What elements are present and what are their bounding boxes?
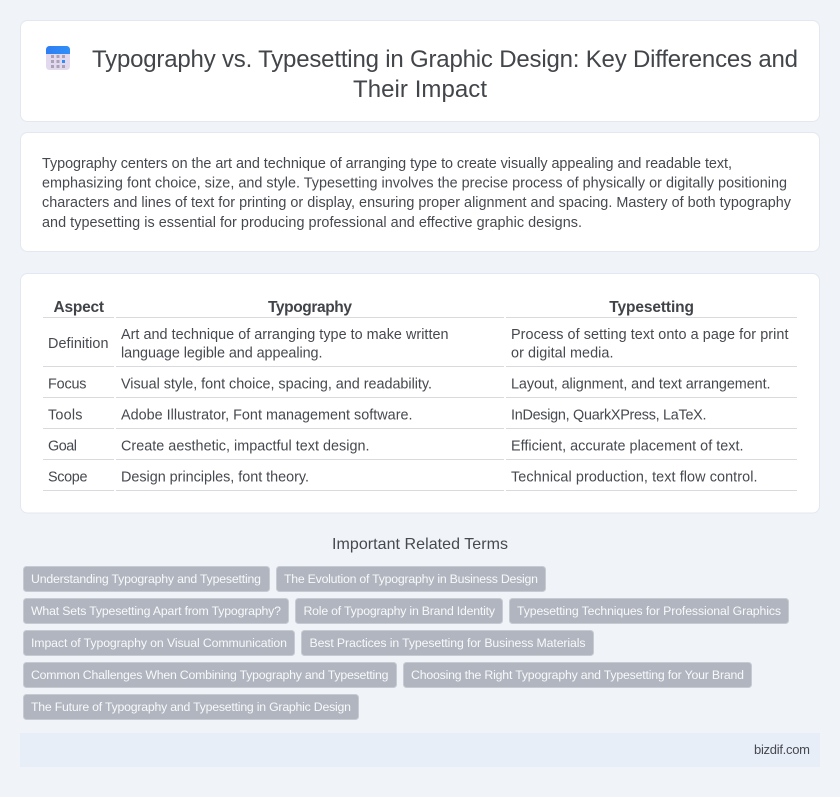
- tag: [24, 694, 358, 720]
- table row: scope: Technical production, text flow control.: [511, 469, 758, 485]
- tag: [24, 566, 270, 592]
- tag: [24, 630, 294, 656]
- panel: intro paragraph: [20, 132, 820, 252]
- table row: scope: [43, 469, 797, 491]
- table row: definition: Art and technique of arranging type to make written: [121, 327, 448, 343]
- tag: [302, 630, 594, 656]
- table row: tools: Tools: [48, 407, 82, 423]
- tag: [24, 598, 288, 624]
- tag: What Sets Typesetting Apart from Typography?: [31, 604, 281, 618]
- table row: definition: or digital media.: [511, 346, 614, 362]
- table row: definition: Process of setting text onto a page for print: [511, 327, 788, 343]
- panel: title card: [20, 20, 820, 122]
- panel: comparison table: [20, 274, 820, 513]
- text block: intro: characters and lines of text for printing or display, ensuring proper alignment and spacing. Mastery of both typography: [42, 195, 792, 211]
- text block: intro: [42, 156, 792, 231]
- tag: The Evolution of Typography in Business Design: [284, 572, 538, 586]
- title: Their Impact: [353, 76, 487, 103]
- panel: related term tags: [24, 566, 788, 720]
- table row: scope: Design principles, font theory.: [121, 469, 309, 485]
- table row: focus: Layout, alignment, and text arrangement.: [511, 376, 770, 392]
- tag: Best Practices in Typesetting for Business Materials: [310, 636, 586, 650]
- table header row: [43, 299, 797, 318]
- tag: Common Challenges When Combining Typography and Typesetting: [31, 668, 389, 682]
- tag: Impact of Typography on Visual Communication: [31, 636, 287, 650]
- table row: tools: InDesign, QuarkXPress, LaTeX.: [511, 407, 706, 423]
- table row: focus: Focus: [48, 376, 86, 392]
- footer source text: bizdif.com: [754, 742, 810, 757]
- tag: Understanding Typography and Typesetting: [31, 572, 261, 586]
- footer bar: [20, 733, 820, 767]
- table row: definition: Definition: [48, 336, 108, 352]
- table row: definition: language legible and appealing.: [121, 346, 322, 362]
- tag: [276, 566, 546, 592]
- table row: focus: [43, 376, 797, 398]
- text block: intro: Typography centers on the art and technique of arranging type to create visually appealing and readable text,: [42, 156, 732, 172]
- table row: goal: Goal: [48, 438, 77, 454]
- tag: [510, 598, 788, 624]
- table row: focus: Visual style, font choice, spacing, and readability.: [121, 376, 432, 392]
- text block: intro: emphasizing font choice, size, and style. Typesetting involves the precise process of physically or digitally positioning: [42, 176, 787, 192]
- table row: goal: Create aesthetic, impactful text design.: [121, 438, 370, 454]
- tag: [296, 598, 502, 624]
- tag: Typesetting Techniques for Professional Graphics: [517, 604, 781, 618]
- tag: [404, 662, 752, 688]
- tag: Role of Typography in Brand Identity: [304, 604, 496, 618]
- title: [92, 46, 798, 103]
- table row: tools: Adobe Illustrator, Font management software.: [121, 407, 412, 423]
- icon: calendar grid: [46, 46, 70, 70]
- title: Typography vs. Typesetting in Graphic Design: Key Differences and: [92, 46, 798, 73]
- table row: definition: [43, 327, 797, 367]
- tag: [24, 662, 396, 688]
- heading: related terms: Important Related Terms: [332, 536, 508, 553]
- table row: goal: [43, 438, 797, 460]
- table header row: Typesetting: [609, 299, 694, 316]
- tag: Choosing the Right Typography and Typesetting for Your Brand: [411, 668, 744, 682]
- table header row: Typography: [268, 299, 352, 316]
- text block: intro: and typesetting is essential for producing professional and effective graphic designs.: [42, 215, 582, 231]
- table header row: Aspect: [54, 299, 104, 316]
- table row: goal: Efficient, accurate placement of text.: [511, 438, 744, 454]
- table row: scope: Scope: [48, 469, 88, 485]
- table row: tools: [43, 407, 797, 429]
- tag: The Future of Typography and Typesetting in Graphic Design: [31, 700, 351, 714]
